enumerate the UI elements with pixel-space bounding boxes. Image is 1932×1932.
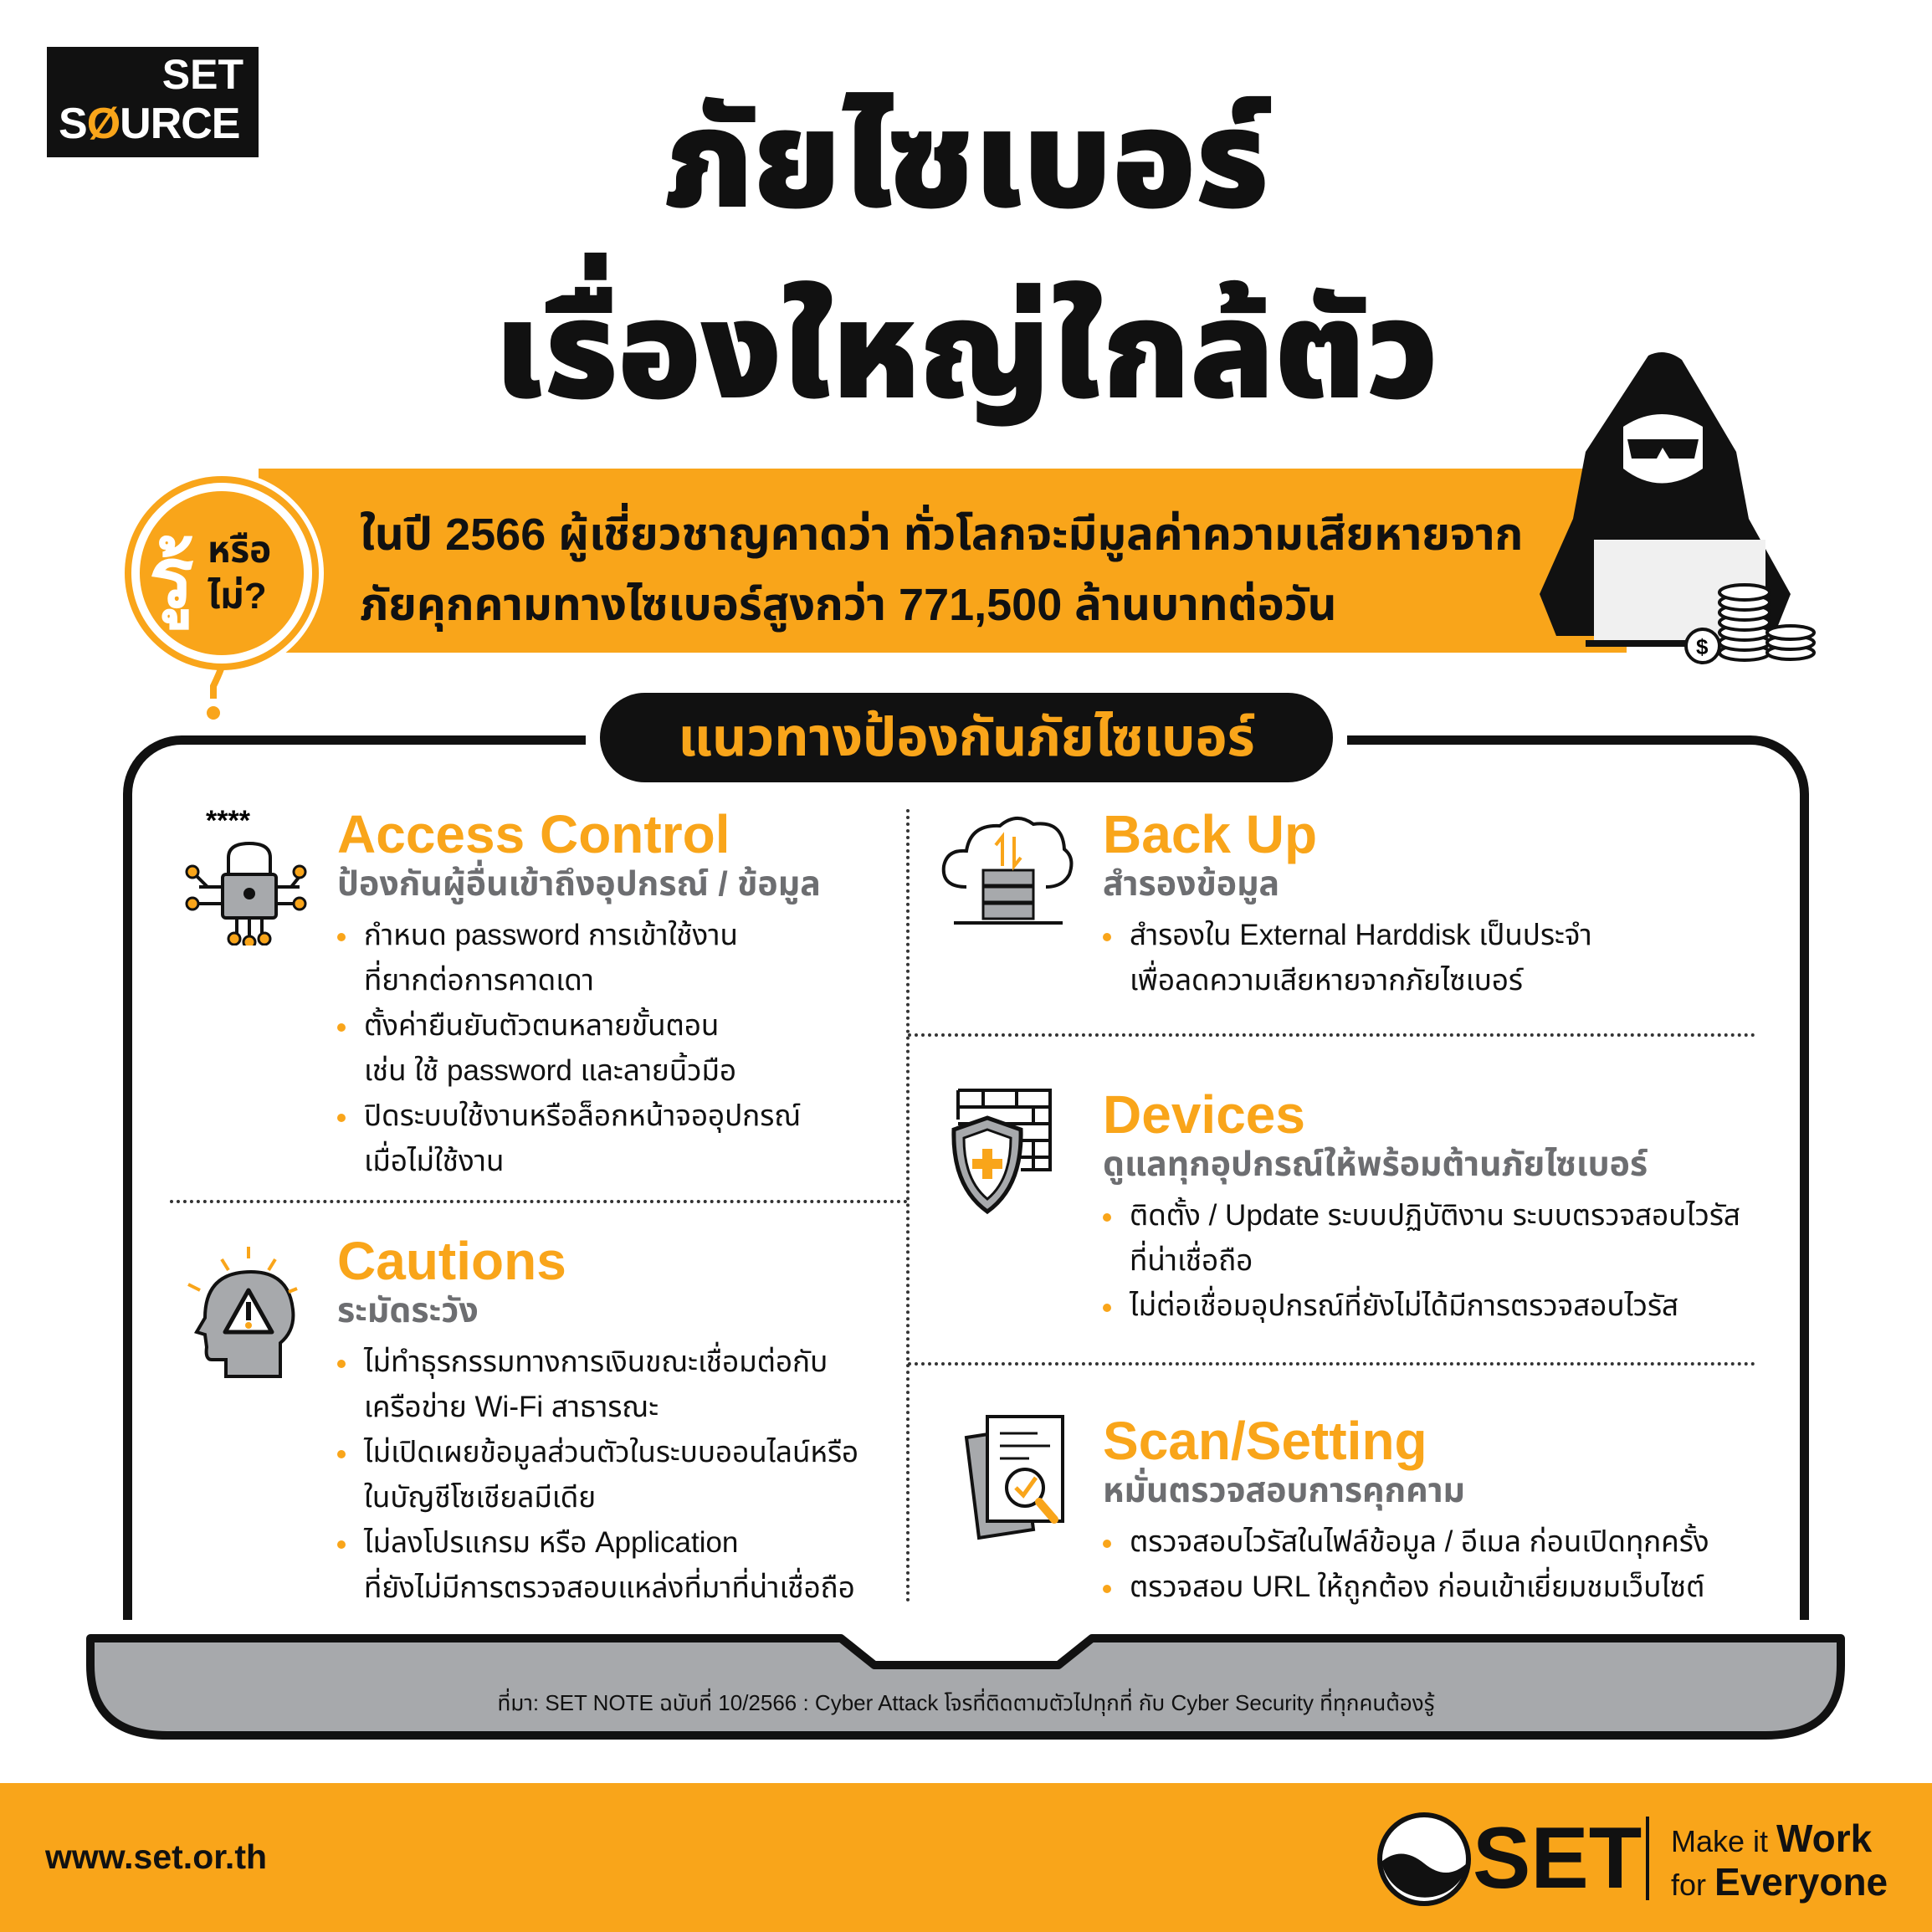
footer bar: [0, 1783, 1932, 1932]
callout: รู้หรือไม่: [125, 476, 324, 720]
panel: cautions: ไม่ทำธุรกรรมทางการเงินขณะเชื่อมต่อกับ: [364, 1345, 828, 1378]
text: แนวทางป้องกันภัยไซเบอร์: [678, 707, 1255, 767]
icon: document scan: [964, 1415, 1064, 1540]
icon: hacker with coins: $: [1696, 634, 1709, 659]
panel: devices: [951, 1084, 1740, 1323]
panel: devices: ติดตั้ง / Update ระบบปฏิบัติงาน ระบบตรวจสอบไวรัส: [1130, 1199, 1740, 1232]
banner text: ในปี 2566 ผู้เชี่ยวชาญคาดว่า ทั่วโลกจะมีมูลค่าความเสียหายจาก: [360, 510, 1523, 560]
panel: back up: เพื่อลดความเสียหายจากภัยไซเบอร์: [1130, 964, 1523, 997]
panel: access control: [186, 804, 821, 1177]
panel: scan/setting: [964, 1411, 1709, 1605]
panel: cautions: ไม่เปิดเผยข้อมูลส่วนตัวในระบบออนไลน์หรือ: [364, 1436, 858, 1468]
dividers: [906, 809, 910, 1602]
panel: cautions: ระมัดระวัง: [337, 1291, 479, 1330]
panel: access control: ปิดระบบใช้งานหรือล็อกหน้าจออุปกรณ์: [364, 1099, 801, 1132]
footer url: www.set.or.th: [45, 1837, 267, 1876]
panel: cautions: Cautions: [337, 1231, 566, 1291]
panel: access control: ที่ยากต่อการคาดเดา: [364, 964, 594, 997]
laptop base: [86, 1634, 1845, 1740]
SET logo: SET: [1473, 1810, 1642, 1907]
orange banner: [259, 469, 1627, 653]
panel: cautions: [187, 1231, 858, 1604]
icon: hacker with coins: [1540, 352, 1816, 664]
title: [495, 83, 1437, 427]
icon: lock network: ****: [206, 805, 251, 837]
icon: lock network: [186, 805, 306, 946]
panel: devices: ไม่ต่อเชื่อมอุปกรณ์ที่ยังไม่ได้มีการตรวจสอบไวรัส: [1130, 1289, 1678, 1322]
SET logo: Make it Work: [1671, 1817, 1872, 1860]
panel: access control: ตั้งค่ายืนยันตัวตนหลายขั้นตอน: [364, 1009, 719, 1042]
SET logo: [1377, 1810, 1888, 1907]
panel: scan/setting: ตรวจสอบ URL ให้ถูกต้อง ก่อนเข้าเยี่ยมชมเว็บไซต์: [1130, 1571, 1704, 1603]
panel: access control: Access Control: [337, 804, 730, 864]
panel: access control: กำหนด password การเข้าใช้งาน: [364, 919, 738, 951]
panel: access control: เมื่อไม่ใช้งาน: [364, 1145, 504, 1177]
SET logo: for Everyone: [1671, 1860, 1888, 1904]
icon: firewall shield: [951, 1089, 1052, 1215]
callout: รู้หรือไม่: หรือ: [208, 530, 271, 571]
title: ภัยไซเบอร์: [664, 83, 1268, 236]
panel: back up: สำรองใน External Harddisk เป็นประจำ: [1130, 919, 1592, 951]
logo: SET SOURCE: SET: [162, 51, 243, 98]
panel: scan/setting: หมั่นตรวจสอบการคุกคาม: [1103, 1471, 1465, 1509]
title: เรื่องใหญ่ใกล้ตัว: [495, 274, 1437, 427]
section pill heading: [586, 686, 1347, 791]
panel: cautions: ในบัญชีโซเชียลมีเดีย: [364, 1481, 596, 1514]
panel: cautions: ที่ยังไม่มีการตรวจสอบแหล่งที่มาที่น่าเชื่อถือ: [364, 1571, 855, 1604]
panel: access control: ป้องกันผู้อื่นเข้าถึงอุปกรณ์ / ข้อมูล: [337, 864, 821, 903]
panel: back up: Back Up: [1103, 804, 1317, 864]
panel: back up: สำรองข้อมูล: [1103, 864, 1279, 903]
source text: ที่มา: SET NOTE ฉบับที่ 10/2566 : Cyber Attack โจรที่ติดตามตัวไปทุกที่ กับ Cyber Security ที่ทุกคนต้องรู้: [498, 1690, 1434, 1715]
laptop screen frame: [123, 735, 1809, 1620]
panel: devices: ดูแลทุกอุปกรณ์ให้พร้อมต้านภัยไซเบอร์: [1103, 1145, 1648, 1183]
banner text: [360, 503, 1523, 633]
logo: SET SOURCE: [47, 47, 259, 157]
panel: cautions: เครือข่าย Wi-Fi สาธารณะ: [364, 1391, 659, 1423]
icon: cloud server: [942, 817, 1073, 925]
callout: รู้หรือไม่: รู้: [149, 531, 194, 630]
callout: รู้หรือไม่: ไม่?: [208, 576, 267, 617]
panel: scan/setting: ตรวจสอบไวรัสในไฟล์ข้อมูล / อีเมล ก่อนเปิดทุกครั้ง: [1130, 1525, 1709, 1558]
panel: back up: [942, 804, 1592, 997]
icon: head with warning: [187, 1247, 298, 1378]
panel: scan/setting: Scan/Setting: [1103, 1411, 1427, 1471]
panel: access control: เช่น ใช้ password และลายนิ้วมือ: [364, 1054, 736, 1087]
panel: devices: ที่น่าเชื่อถือ: [1130, 1244, 1253, 1277]
panel: cautions: ไม่ลงโปรแกรม หรือ Application: [364, 1526, 738, 1559]
logo: SET SOURCE: SØURCE: [59, 100, 239, 148]
banner text: ภัยคุกคามทางไซเบอร์สูงกว่า 771,500 ล้านบาทต่อวัน: [360, 580, 1336, 630]
panel: devices: Devices: [1103, 1084, 1305, 1145]
